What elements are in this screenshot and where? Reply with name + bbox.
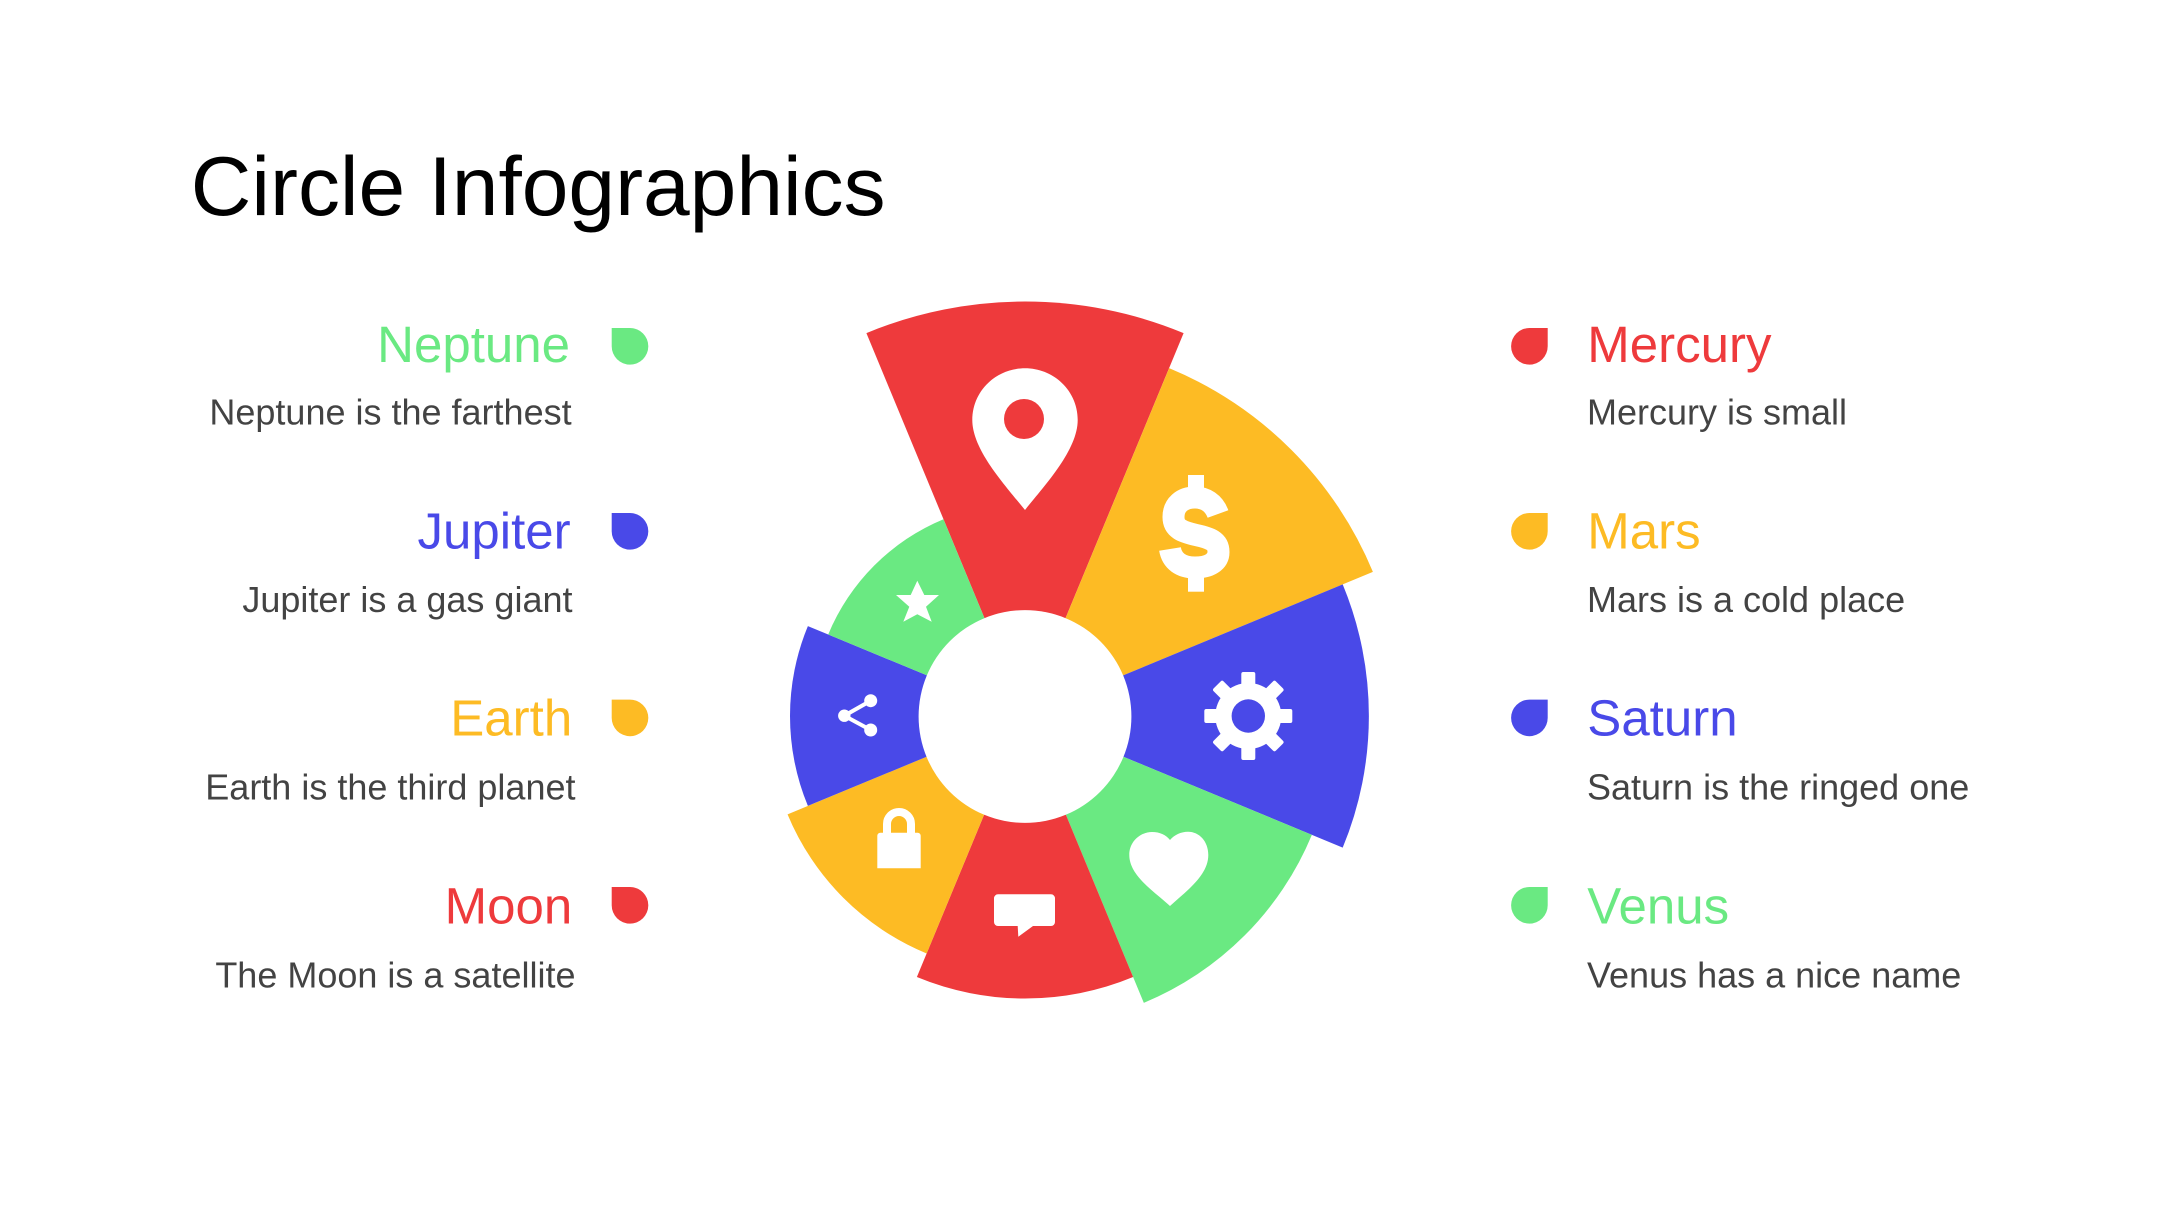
marker: Jupiter xyxy=(612,513,648,550)
sector: blue left xyxy=(790,626,1025,806)
left list: Moon xyxy=(215,878,648,996)
marker: Mercury xyxy=(1511,328,1548,365)
right list: Saturn xyxy=(1511,690,1969,808)
left list: Neptune: Neptune is the farthest xyxy=(209,392,572,432)
right list: Venus: Venus has a nice name xyxy=(1587,954,1961,996)
left list: Jupiter: Jupiter is a gas giant xyxy=(242,579,572,620)
marker: Venus xyxy=(1511,887,1548,924)
right list: Saturn: Saturn is the ringed one xyxy=(1587,766,1969,808)
right list: Saturn: Saturn xyxy=(1587,690,1738,746)
sector: yellow upper right xyxy=(923,348,1393,818)
right list: Mercury: Mercury is small xyxy=(1587,392,1847,432)
marker: Earth xyxy=(612,700,648,736)
center hole xyxy=(919,610,1131,823)
sector: red bottom xyxy=(917,716,1133,999)
left list: Earth: Earth xyxy=(450,690,572,746)
sector: red top xyxy=(866,302,1184,716)
marker: Mars xyxy=(1511,513,1548,550)
sector: yellow lower left xyxy=(774,646,1095,967)
sector: green lower right xyxy=(941,632,1329,1020)
right list: Mars xyxy=(1511,502,1905,620)
left list: Moon: The Moon is a satellite xyxy=(215,954,576,996)
left list: Jupiter xyxy=(242,502,648,620)
marker: Neptune xyxy=(612,328,648,365)
icon: chat bubble xyxy=(994,894,1055,937)
right list: Venus xyxy=(1511,878,1961,996)
left list: Neptune xyxy=(209,316,648,432)
right list: Mars: Mars is a cold place xyxy=(1587,579,1905,620)
sector: green upper left xyxy=(817,508,1083,774)
left list: Moon: Moon xyxy=(445,878,572,934)
icon: gear xyxy=(1204,672,1292,760)
marker: Saturn xyxy=(1511,700,1548,736)
marker: Moon xyxy=(612,887,648,924)
icon: dollar xyxy=(1170,475,1218,592)
right list: Venus: Venus xyxy=(1587,878,1729,934)
left list: Earth: Earth is the third planet xyxy=(205,766,576,808)
icon: star xyxy=(896,581,939,622)
icon: location pin xyxy=(972,368,1078,510)
circular spiral chart xyxy=(774,302,1393,1020)
left list: Earth xyxy=(205,690,648,808)
right list: Mercury: Mercury xyxy=(1587,316,1772,373)
sector: blue right xyxy=(1025,584,1369,848)
left list: Neptune: Neptune xyxy=(377,316,570,373)
right list: Mercury xyxy=(1511,316,1847,432)
icon: share xyxy=(838,694,877,736)
icon: padlock xyxy=(877,812,921,868)
right list: Mars: Mars xyxy=(1587,502,1701,560)
left list: Jupiter: Jupiter xyxy=(418,502,571,560)
icon: heart xyxy=(1129,832,1208,906)
title: Circle Infographics xyxy=(191,139,886,233)
